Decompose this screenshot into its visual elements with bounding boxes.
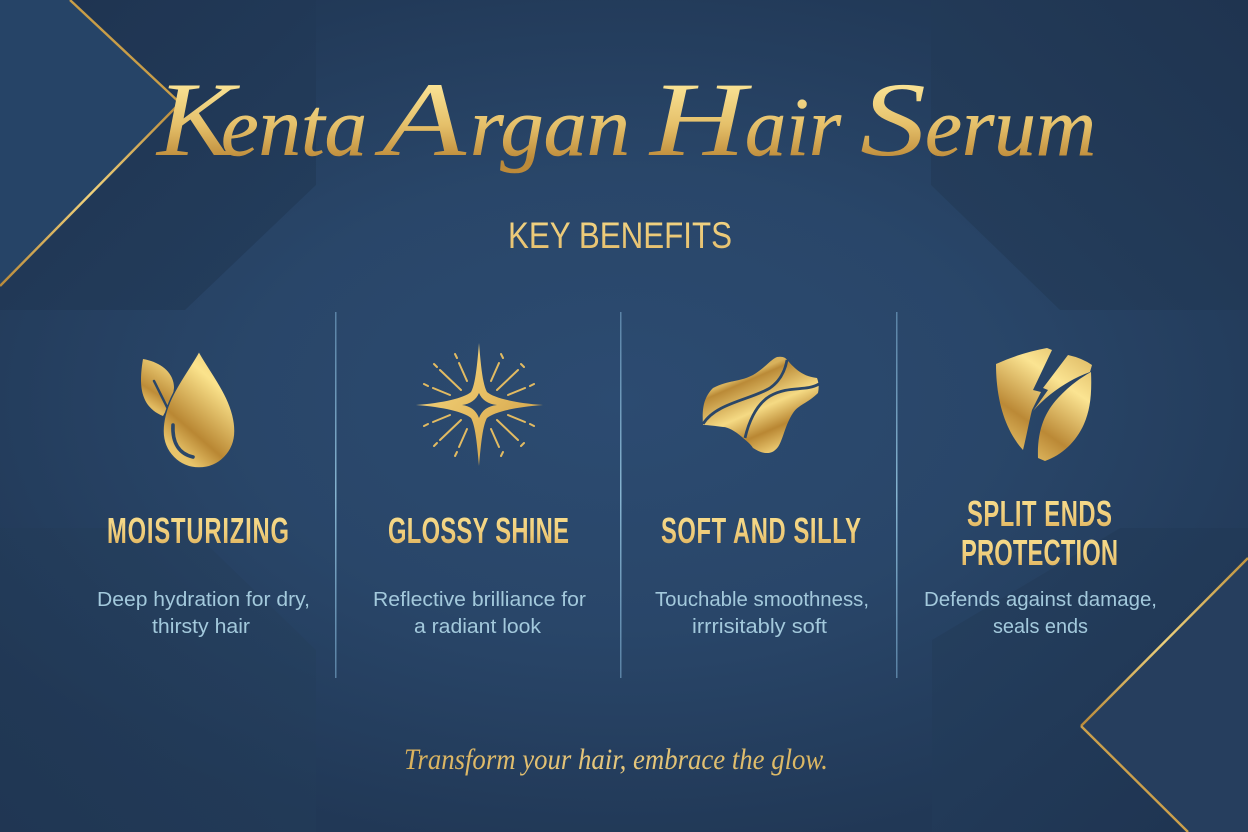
panel: soft and silly	[655, 357, 869, 638]
heading: split ends protection: PROTECTION	[961, 533, 1118, 573]
gold corner lines: bottom right	[1081, 558, 1248, 832]
description: split ends protection	[924, 589, 1157, 638]
description: glossy shine: Reflective brilliance for	[373, 589, 586, 611]
heading: split ends protection	[961, 494, 1118, 573]
description: moisturizing: thirsty hair	[152, 616, 250, 638]
icon: sparkle star	[416, 343, 543, 466]
title: enta	[221, 81, 367, 174]
panel: split ends protection	[924, 348, 1157, 638]
title: air	[745, 81, 841, 174]
title: A	[374, 61, 468, 178]
title	[155, 61, 1096, 178]
subtitle: KEY BENEFITS	[508, 215, 732, 256]
heading: glossy shine: GLOSSY SHINE	[388, 511, 569, 551]
icon: leaf and water drop	[141, 351, 235, 468]
corner panel: bottom right	[1081, 558, 1248, 832]
panel: glossy shine	[373, 343, 586, 638]
description: moisturizing	[97, 589, 310, 638]
description: soft and silly: irrrisitably soft	[692, 616, 827, 638]
title: H	[647, 61, 753, 178]
title: rgan	[470, 81, 630, 174]
heading: moisturizing: MOISTURIZING	[107, 511, 289, 551]
title: K	[155, 61, 241, 178]
heading: soft and silly: SOFT AND SILLY	[661, 511, 861, 551]
column dividers	[335, 312, 898, 678]
description: split ends protection: Defends against damage,	[924, 589, 1157, 611]
tagline: Transform your hair, embrace the glow.	[404, 743, 828, 776]
corner panel: top left	[0, 0, 180, 286]
gold corner lines: top left	[0, 0, 180, 286]
description: soft and silly: Touchable smoothness,	[655, 589, 869, 611]
panel: moisturizing	[97, 351, 310, 638]
description: soft and silly	[655, 589, 869, 638]
icon: shield with lightning	[996, 348, 1092, 461]
title: S	[860, 61, 926, 178]
description: glossy shine	[373, 589, 586, 638]
title: erum	[925, 81, 1096, 174]
heading: split ends protection: SPLIT ENDS	[967, 494, 1112, 534]
description: moisturizing: Deep hydration for dry,	[97, 589, 310, 611]
description: glossy shine: a radiant look	[414, 616, 542, 638]
description: split ends protection: seals ends	[993, 616, 1088, 638]
icon: silk cloth	[703, 357, 819, 453]
